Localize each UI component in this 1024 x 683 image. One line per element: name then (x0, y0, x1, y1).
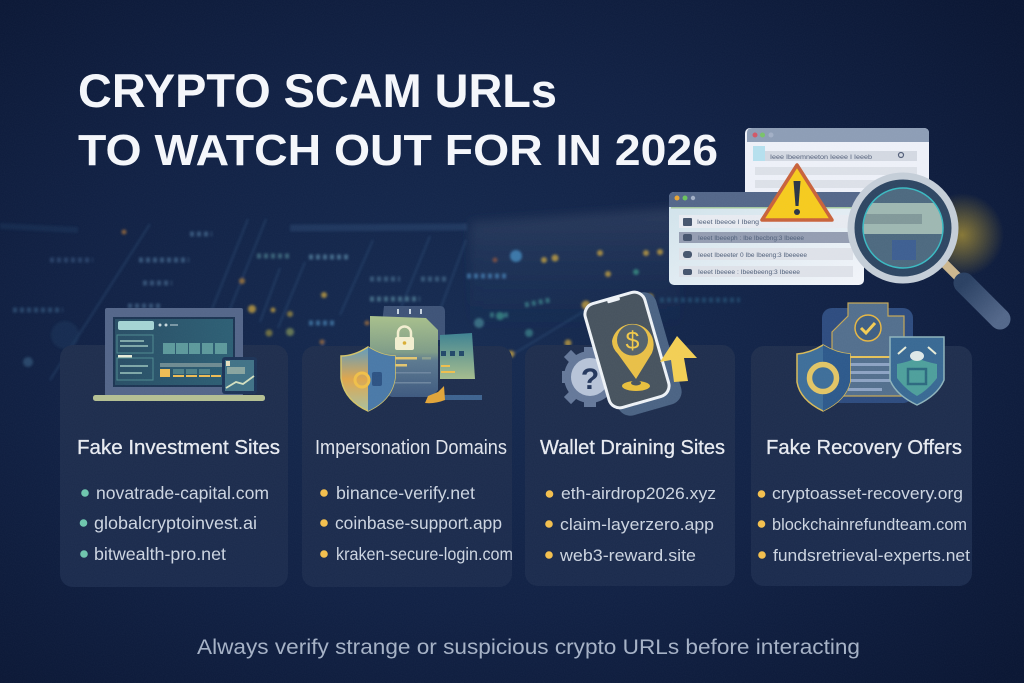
front browser window: Ieeet Ibeeeph : Ibe Ibecbng:3 Ibeeee (698, 235, 804, 242)
list: wallet draining urls: web3-reward.site (559, 546, 696, 565)
list: wallet draining urls: claim-layerzero.app (560, 515, 714, 534)
heading: impersonation domains: Impersonation Domains (315, 437, 507, 459)
front browser window: Ieeet Ibeeoe I Ibeng (697, 219, 759, 226)
front browser window: Ieeet Ibeeee : Ibeebeeng:3 Ibeeee (698, 269, 800, 276)
list: impersonation urls: coinbase-support.app (335, 513, 502, 533)
list: fake investment urls: globalcryptoinvest.ai (94, 513, 257, 533)
list: impersonation urls: binance-verify.net (336, 483, 475, 503)
title (78, 64, 718, 175)
footer note: Always verify strange or suspicious crypto URLs before interacting (197, 636, 860, 659)
illustration: browsers, warning and magnifier (669, 128, 1004, 319)
warning triangle (762, 165, 832, 220)
list: impersonation urls (320, 483, 513, 564)
icon: phone with location pin, gear and arrow: ? (581, 363, 599, 396)
magnifier (851, 176, 1000, 319)
heading: fake recovery offers: Fake Recovery Offers (766, 437, 962, 459)
list: impersonation urls: kraken-secure-login.com (336, 544, 513, 564)
list: fake investment urls: bitwealth-pro.net (94, 544, 226, 564)
front browser window (669, 192, 864, 285)
title: CRYPTO SCAM URLs (78, 64, 557, 117)
yellow glow (920, 193, 1004, 277)
list: fake recovery urls: cryptoasset-recovery.org (772, 484, 963, 503)
list: fake investment urls: novatrade-capital.com (96, 483, 269, 503)
icon: clipboard and shields (797, 303, 944, 411)
back browser window: Ieee Ibeemneeton Ieeee I Ieeeb (770, 154, 872, 161)
panel: fake recovery offers (751, 346, 972, 586)
list: fake recovery urls: blockchainrefundteam.com (772, 515, 967, 534)
heading: wallet draining sites: Wallet Draining Sites (540, 437, 725, 459)
list: fake investment urls (80, 483, 269, 564)
list: fake recovery urls (758, 484, 970, 565)
panel: wallet draining sites (525, 345, 735, 586)
icon: phone with location pin, gear and arrow: $ (626, 327, 640, 355)
front browser window: Ieeet Ibeeeter 0 Ibe Ibeeng:3 Ibeeeee (698, 252, 807, 259)
heading: fake investment sites: Fake Investment Sites (77, 437, 280, 459)
list: fake recovery urls: fundsretrieval-experts.net (773, 546, 970, 565)
list: wallet draining urls (545, 484, 716, 565)
title: TO WATCH OUT FOR IN 2026 (78, 126, 718, 175)
icon: phone with location pin, gear and arrow (562, 289, 697, 419)
back browser window (745, 128, 929, 198)
icon: lock document and shield (341, 306, 482, 411)
background data network (0, 208, 740, 380)
panel: impersonation domains (302, 346, 513, 587)
panel: fake investment sites (60, 345, 288, 587)
icon: laptop with tablet (93, 308, 265, 401)
list: wallet draining urls: eth-airdrop2026.xyz (561, 484, 716, 503)
